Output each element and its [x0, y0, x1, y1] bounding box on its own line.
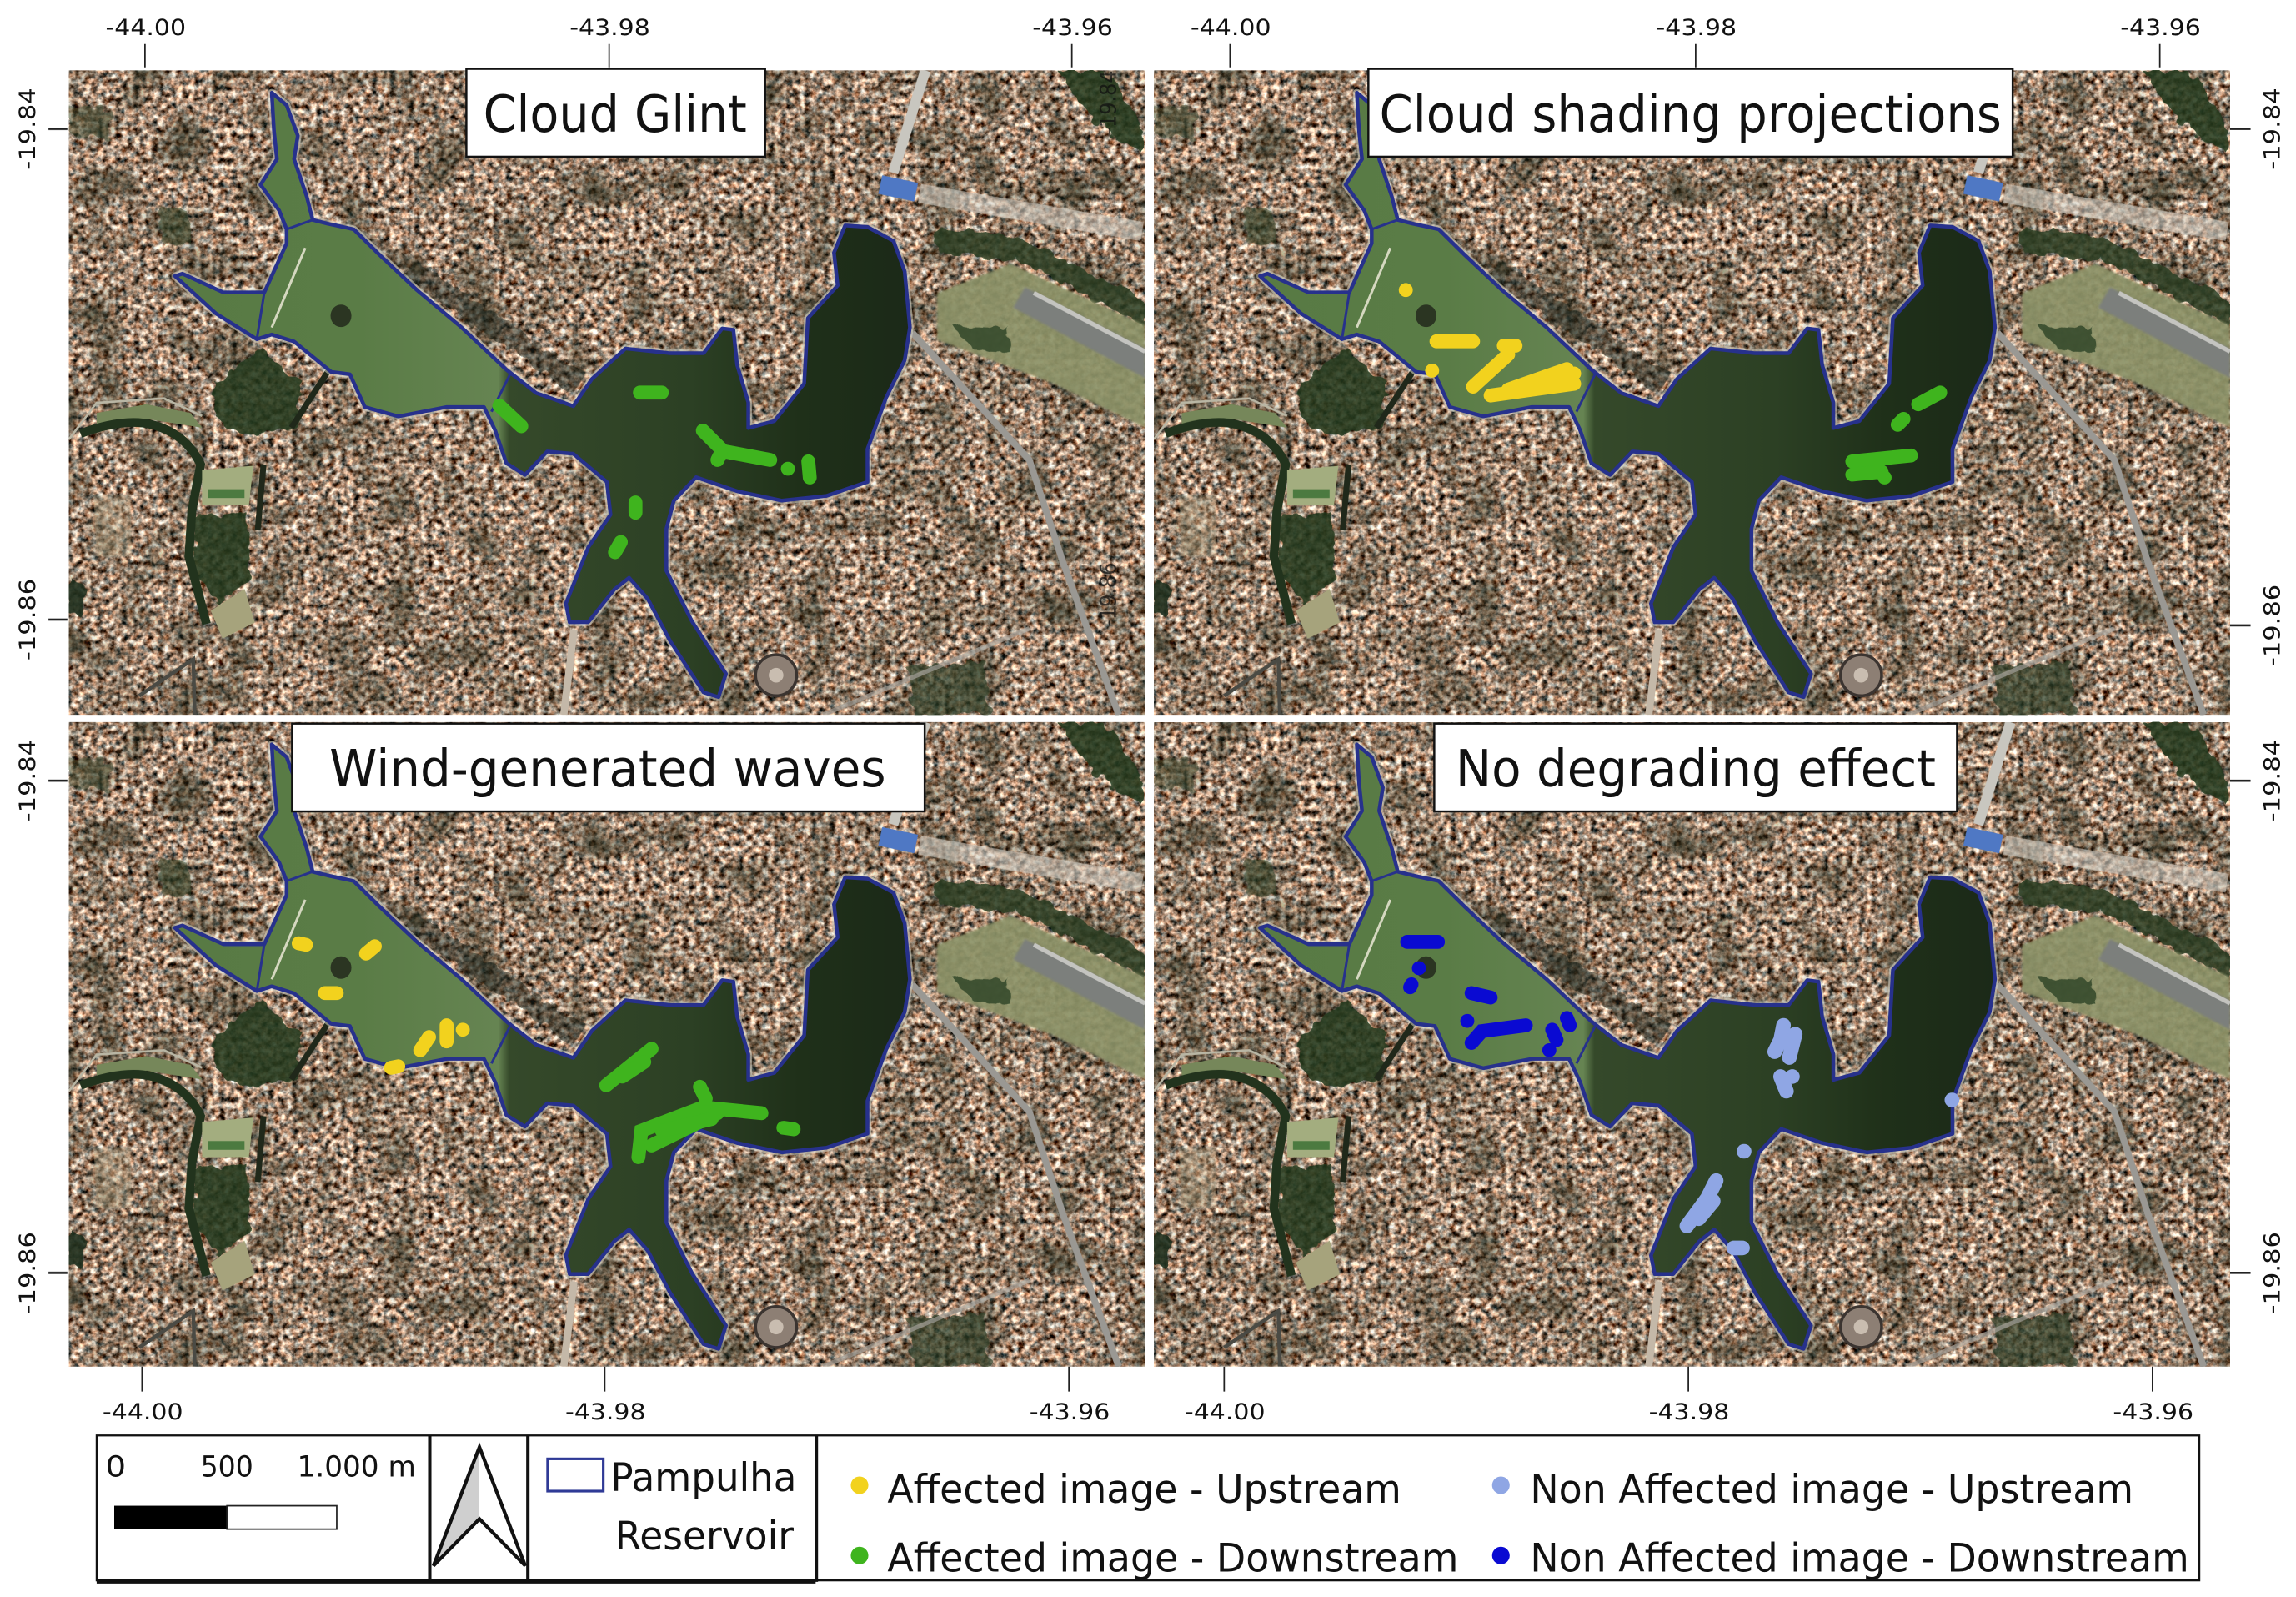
scale bar	[105, 1449, 416, 1529]
top axis labels: -43.98	[1656, 16, 1737, 41]
bottom axis labels: -43.98	[1649, 1400, 1729, 1425]
left axis labels: -19.86	[16, 579, 41, 660]
sample points: downstream	[1407, 942, 1570, 1050]
sample points: upstream	[1406, 290, 1574, 395]
sample points: downstream	[1852, 393, 1940, 478]
ghost coordinate labels: -19.86	[1096, 562, 1121, 627]
top axis labels: -43.96	[1032, 16, 1113, 41]
bottom axis labels: -43.96	[2113, 1400, 2193, 1425]
sample points: upstream	[298, 943, 463, 1067]
bottom axis labels: -44.00	[103, 1400, 183, 1425]
sample points: upstream	[1687, 1025, 1952, 1248]
scale bar: 500	[201, 1449, 253, 1484]
ghost coordinate labels	[1096, 70, 1121, 627]
title: Cloud shading projections: Cloud shading projections	[1380, 85, 2002, 144]
bottom axis labels: -43.98	[565, 1400, 646, 1425]
bottom axis labels: -44.00	[1185, 1400, 1266, 1425]
right axis labels	[2230, 88, 2286, 1313]
top axis labels: -44.00	[1191, 16, 1271, 41]
title: No degrading effect	[1434, 724, 1957, 811]
right axis labels: -19.84	[2261, 88, 2286, 170]
right axis labels: -19.86	[2261, 1232, 2286, 1313]
top axis labels	[105, 16, 2201, 68]
title: No degrading effect: No degrading effect	[1456, 740, 1936, 799]
right axis labels: -19.84	[2261, 740, 2286, 821]
legend: affected downstream: Affected image - Downstream	[887, 1536, 1458, 1582]
panel: cloud glint	[69, 69, 1145, 715]
top axis labels: -43.96	[2120, 16, 2201, 41]
legend: Pampulha Reservoir	[548, 1455, 796, 1559]
legend: non affected upstream: Non Affected image - Upstream	[1530, 1467, 2133, 1513]
icon: north arrow	[434, 1447, 525, 1566]
bottom axis labels: -43.96	[1030, 1400, 1110, 1425]
title: Wind-generated waves: Wind-generated waves	[329, 740, 886, 799]
sample points: downstream	[499, 393, 810, 552]
legend: non affected downstream: Non Affected image - Downstream	[1530, 1536, 2189, 1582]
top axis labels: -44.00	[105, 16, 186, 41]
title: Wind-generated waves	[292, 724, 925, 811]
left axis labels: -19.86	[16, 1232, 41, 1313]
left axis labels: -19.84	[16, 740, 41, 821]
panel: no degrading effect	[1154, 722, 2230, 1367]
right axis labels: -19.86	[2261, 585, 2286, 666]
sample points: downstream	[606, 1049, 794, 1158]
left axis labels: -19.84	[16, 88, 41, 170]
panel: wind-generated waves	[69, 722, 1145, 1367]
legend frame	[97, 1435, 2199, 1582]
legend: affected upstream: Affected image - Upstream	[887, 1467, 1401, 1513]
left axis labels	[16, 88, 68, 1313]
bottom axis labels	[103, 1367, 2193, 1425]
top axis labels: -43.98	[569, 16, 650, 41]
title: Cloud Glint: Cloud Glint	[484, 85, 747, 144]
title: Cloud Glint	[466, 69, 765, 157]
scale bar: 0	[105, 1449, 126, 1484]
ghost coordinate labels: -19.84	[1096, 70, 1121, 135]
scale bar: 1.000 m	[298, 1449, 416, 1484]
title: Cloud shading projections	[1368, 69, 2013, 157]
legend: Pampulha Reservoir: Reservoir	[615, 1514, 794, 1559]
legend: Pampulha Reservoir: Pampulha	[610, 1455, 796, 1501]
panel: cloud shading projections	[1154, 69, 2230, 715]
